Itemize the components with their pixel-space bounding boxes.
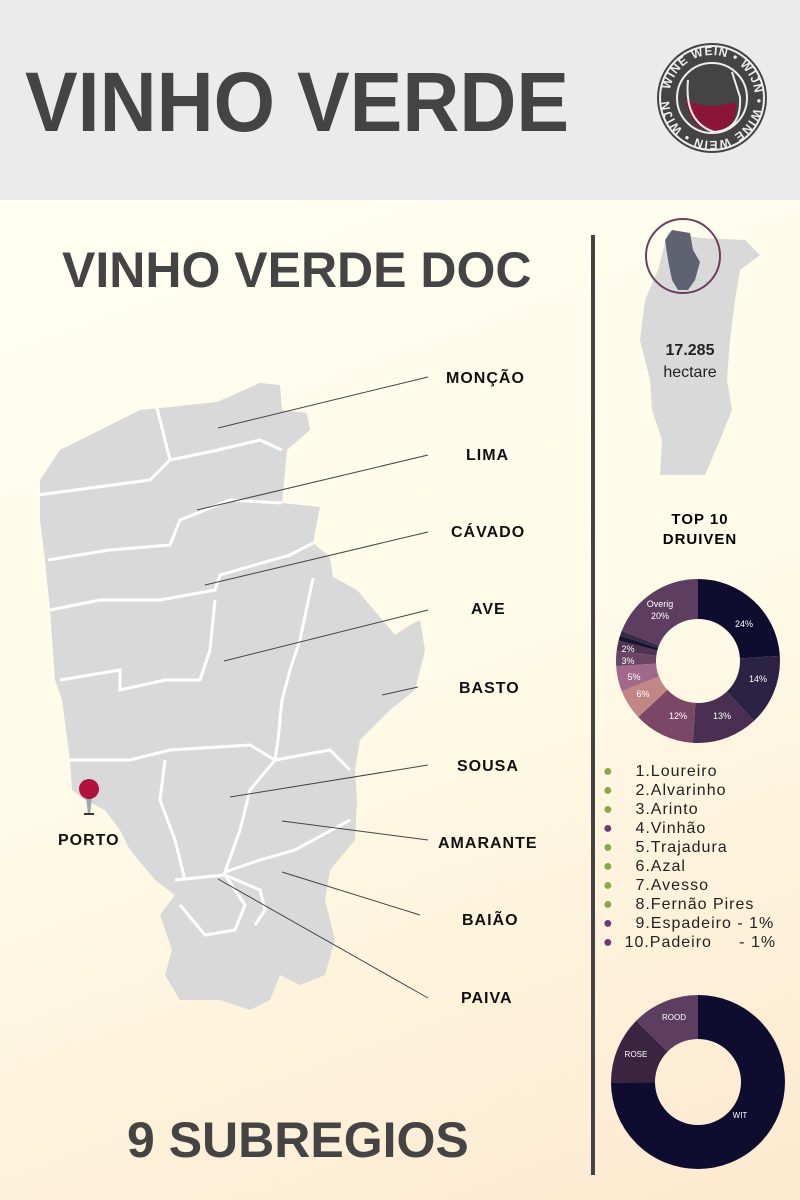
- donut: grapes: [616, 579, 780, 743]
- donut: grapes: 3%: [621, 656, 635, 666]
- text: BASTO: [459, 680, 520, 697]
- grape list: ● 2.Alvarinho: [603, 782, 726, 799]
- donut: grapes: 14%: [749, 674, 767, 684]
- donut: grapes: 20%: [651, 611, 669, 621]
- grape list: ● 4.Vinhão: [603, 820, 706, 837]
- donut: grapes: 2%: [621, 644, 635, 654]
- donut: colour: WIT: [733, 1111, 747, 1120]
- text: BAIÃO: [462, 912, 519, 929]
- donut: grapes: 13%: [713, 711, 731, 721]
- subregion labels: [438, 369, 538, 1007]
- donut: grapes: 5%: [627, 672, 641, 682]
- grape list: ● 8.Fernão Pires: [603, 896, 754, 913]
- donut: grapes: 24%: [735, 619, 753, 629]
- label: porto: PORTO: [58, 832, 120, 849]
- grape list: ● 3.Arinto: [603, 801, 699, 818]
- heading: top 10: DRUIVEN: [663, 531, 737, 548]
- heading: doc: VINHO VERDE DOC: [62, 242, 532, 298]
- stat: hectare: hectare: [663, 364, 717, 381]
- text: AVE: [471, 601, 506, 618]
- porto pin: [79, 779, 99, 815]
- text: AMARANTE: [438, 835, 538, 852]
- stat: hectare: 17.285: [666, 342, 714, 359]
- title: VINHO VERDE: [25, 55, 569, 149]
- divider: [591, 235, 595, 1175]
- donut: colour: ROOD: [662, 1013, 686, 1022]
- grape list: ● 1.Loureiro: [603, 763, 718, 780]
- text: LIMA: [466, 447, 509, 464]
- text: PAIVA: [461, 990, 513, 1007]
- grape list: ● 10.Padeiro - 1%: [603, 934, 776, 951]
- heading: top 10: [663, 511, 737, 548]
- donut: grapes: 12%: [669, 711, 687, 721]
- donut: colour: [611, 995, 785, 1169]
- heading: top 10: TOP 10: [671, 511, 729, 528]
- text: SOUSA: [457, 758, 519, 775]
- donut: grapes: 6%: [636, 689, 650, 699]
- footer heading: 9 SUBREGIOS: [127, 1112, 469, 1168]
- grape list: ● 9.Espadeiro - 1%: [603, 915, 774, 932]
- map: subregions: [38, 376, 428, 1010]
- text: MONÇÃO: [446, 370, 525, 387]
- donut: colour: ROSE: [625, 1050, 647, 1059]
- grape list: ● 7.Avesso: [603, 877, 709, 894]
- grape list: ● 5.Trajadura: [603, 839, 728, 856]
- header band: [0, 0, 800, 200]
- grape list: [603, 763, 776, 951]
- stat: hectare: [663, 342, 717, 381]
- portugal map: [640, 218, 760, 475]
- grape list: ● 6.Azal: [603, 858, 686, 875]
- donut: grapes: Overig: [647, 599, 673, 609]
- text: CÁVADO: [451, 524, 525, 541]
